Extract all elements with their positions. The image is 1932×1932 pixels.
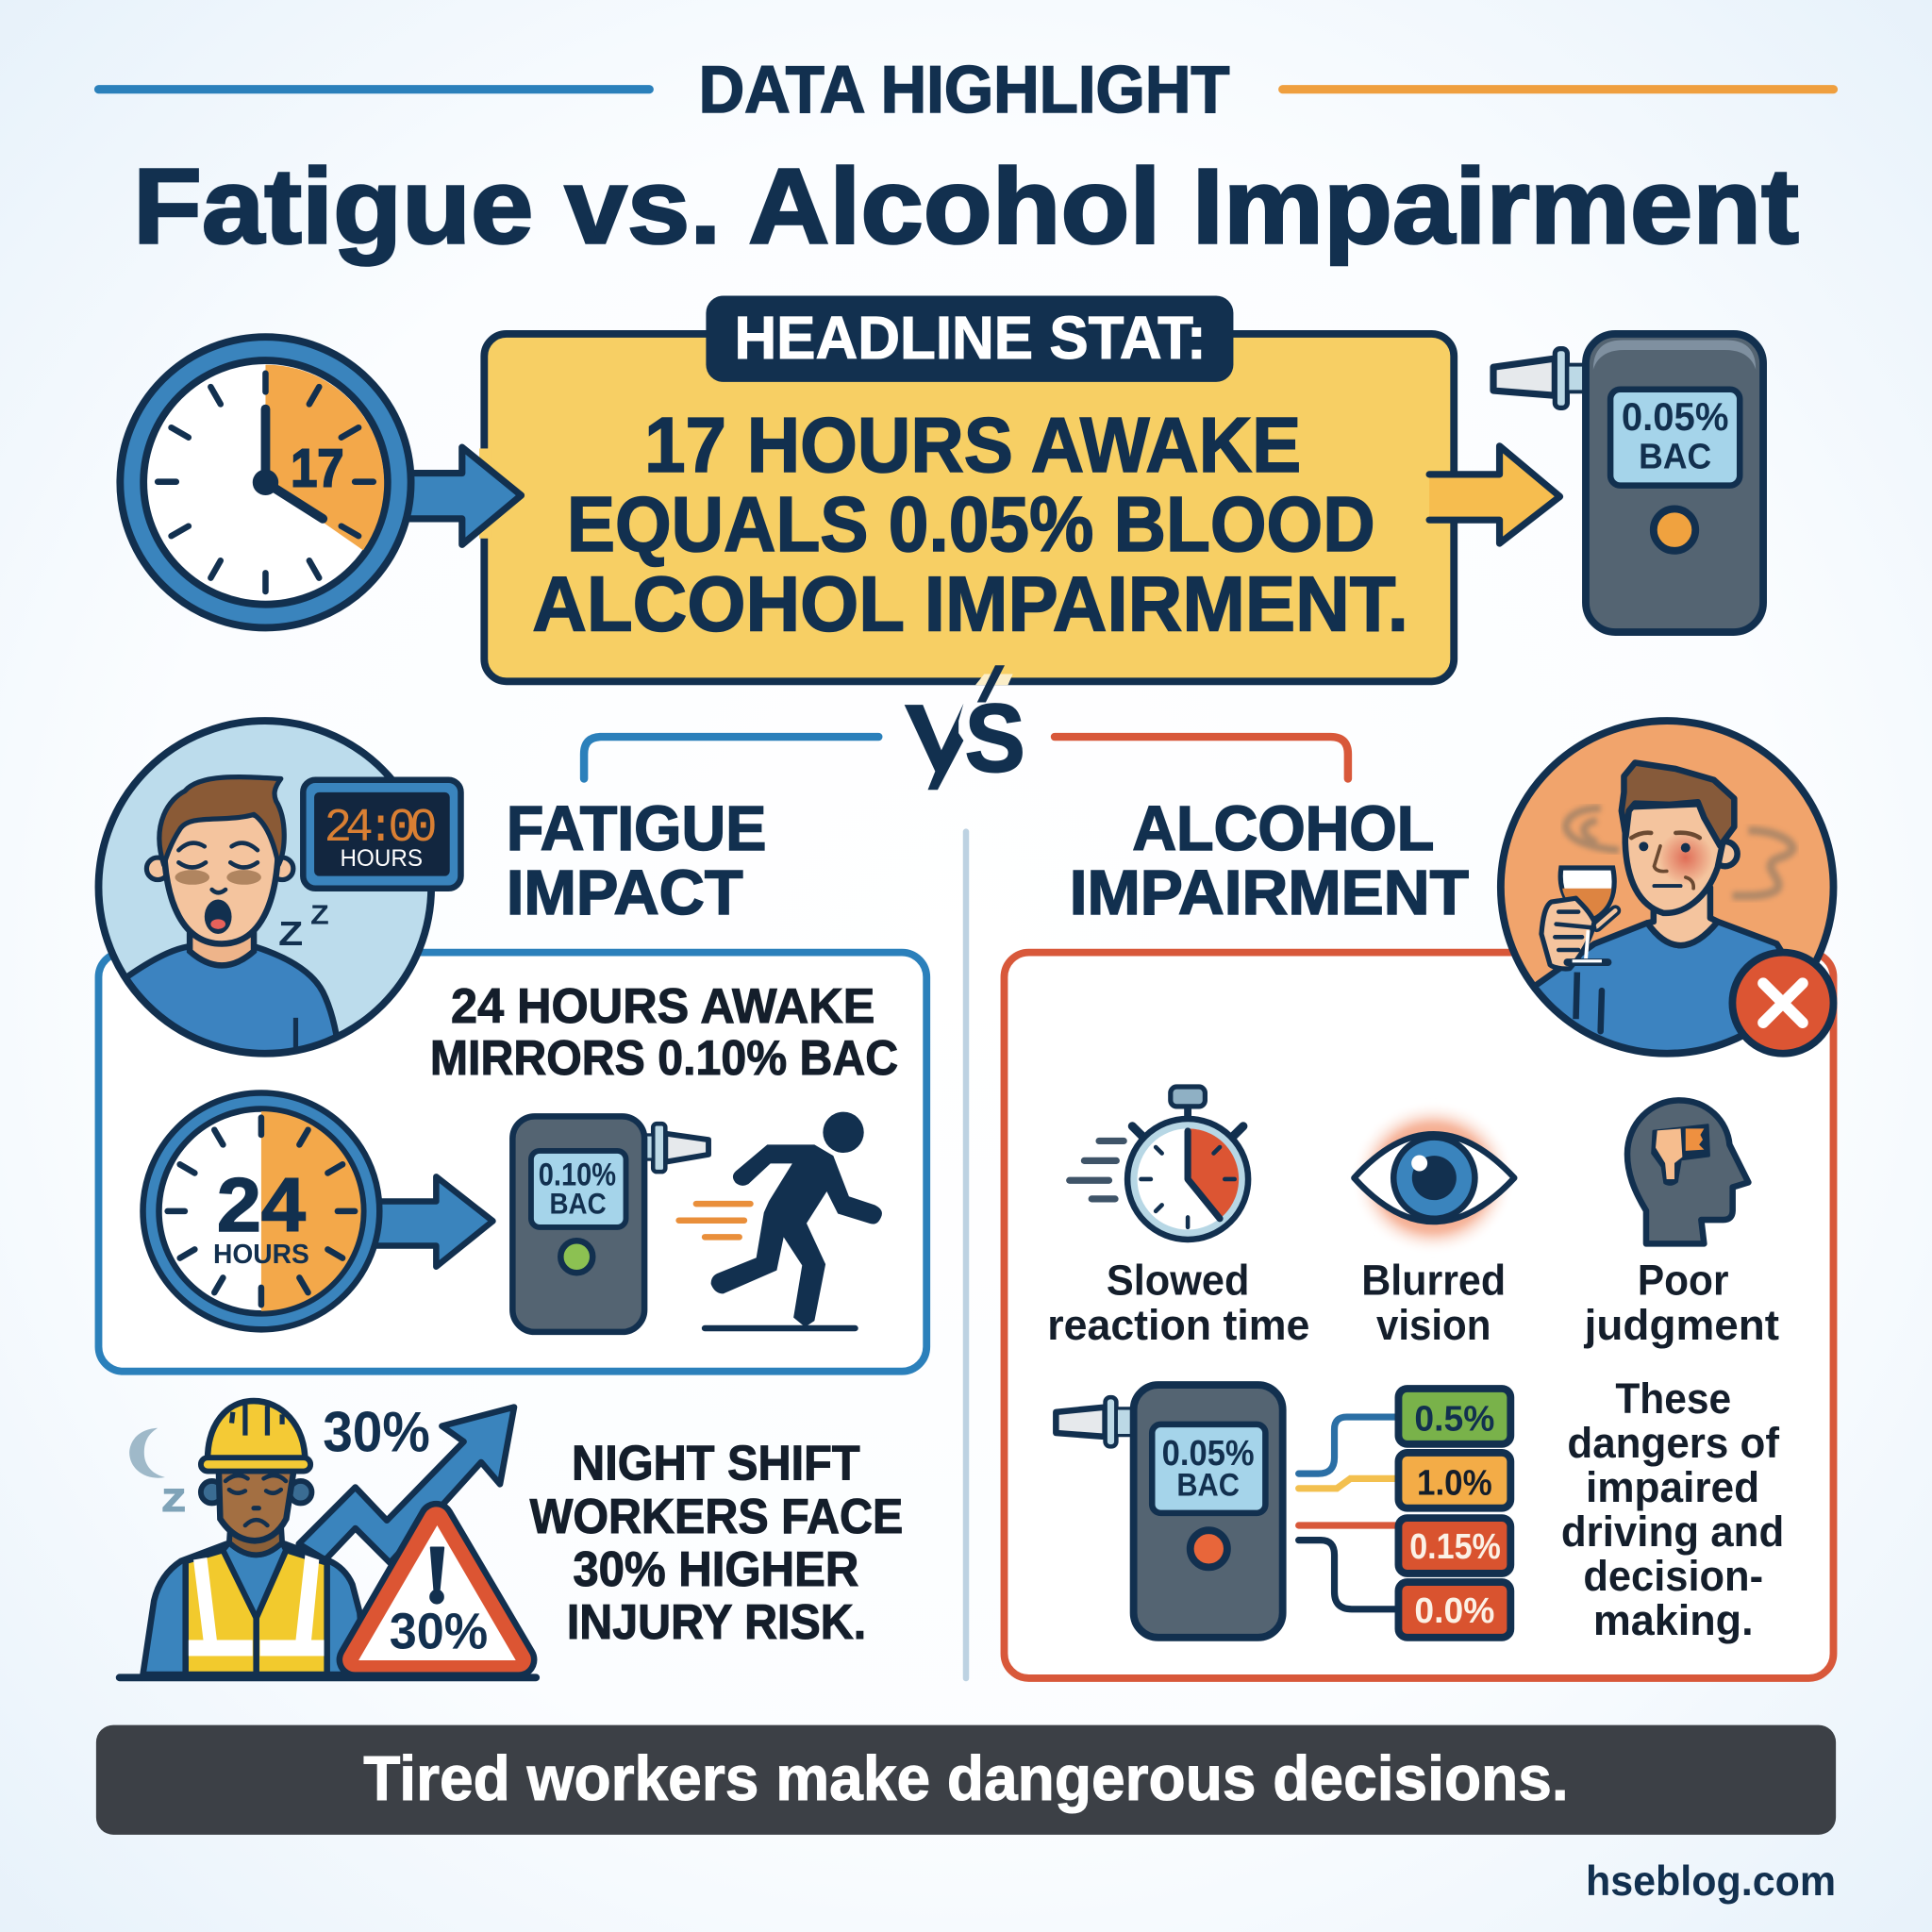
fatigue statement: 24 HOURS AWAKE <box>451 979 874 1034</box>
night shift statement: INJURY RISK. <box>567 1595 866 1650</box>
title: Fatigue vs. Alcohol Impairment <box>133 146 1799 266</box>
icon: stumbling figure <box>679 1112 882 1328</box>
icon: breathalyzer with levels: BAC <box>1176 1468 1240 1504</box>
icon: tired worker, rising arrow and warning: 30% <box>390 1605 488 1660</box>
dangers statement <box>1561 1374 1784 1644</box>
icon: breathalyzer with levels <box>1056 1385 1510 1638</box>
headline text: ALCOHOL IMPAIRMENT. <box>532 562 1408 648</box>
center divider <box>964 832 968 1678</box>
level 0.5% <box>1398 1389 1510 1444</box>
effect labels: Poor <box>1638 1257 1729 1305</box>
icon: 24 hour clock with arrow <box>143 1093 492 1329</box>
night shift statement <box>530 1437 903 1650</box>
icon: stopwatch <box>1070 1087 1248 1240</box>
effect labels: Slowed <box>1107 1257 1249 1305</box>
fatigue statement <box>430 979 898 1086</box>
wine glass in hand <box>1541 868 1615 969</box>
icon: breathalyzer 0.05% <box>1493 334 1763 632</box>
level 0.5%: 0.5% <box>1414 1399 1494 1439</box>
fatigue statement: MIRRORS 0.10% BAC <box>430 1031 898 1086</box>
headline text: 17 HOURS AWAKE <box>644 403 1301 489</box>
vs mark <box>905 665 1025 792</box>
headline text: EQUALS 0.05% BLOOD <box>567 482 1375 568</box>
effect labels: judgment <box>1584 1301 1779 1349</box>
icon: breathalyzer 0.10% <box>512 1116 708 1332</box>
dangers statement: impaired <box>1586 1463 1759 1511</box>
heading: fatigue impact: FATIGUE <box>507 794 766 864</box>
icon: breathalyzer 0.10%: 0.10% <box>539 1157 616 1192</box>
level 0.0%: 0.0% <box>1414 1591 1494 1631</box>
connector lines <box>1299 1417 1398 1609</box>
icon: 24 hour clock with arrow: HOURS <box>213 1240 309 1270</box>
dangers statement: making. <box>1593 1596 1754 1644</box>
icon: impaired person portrait <box>1501 721 1848 1059</box>
dangers statement: decision- <box>1583 1552 1763 1600</box>
digital clock 24:00 <box>303 780 460 889</box>
icon: 24 hour clock with arrow: 24 <box>217 1163 306 1248</box>
effect labels: vision <box>1376 1301 1491 1349</box>
icon: tired person portrait: Z <box>310 901 329 931</box>
dangers statement: driving and <box>1561 1507 1784 1556</box>
night shift statement: 30% HIGHER <box>573 1542 858 1597</box>
header: data highlight: DATA HIGHLIGHT <box>699 52 1230 126</box>
level 1.0%: 1.0% <box>1417 1463 1492 1503</box>
level 0.15%: 0.15% <box>1409 1527 1501 1567</box>
digital clock 24:00: 24:00 <box>325 802 438 855</box>
icon: tired worker, rising arrow and warning: Z <box>162 1482 185 1517</box>
vs brackets <box>584 737 1348 778</box>
effect labels <box>1047 1257 1779 1349</box>
effect labels: Blurred <box>1361 1257 1506 1305</box>
icon: 17 hour clock with arrow: 17 <box>291 438 343 497</box>
heading: alcohol impairment: ALCOHOL <box>1132 794 1434 864</box>
arrow to breathalyzer <box>1429 446 1560 543</box>
icon: head with thumbs down <box>1627 1100 1748 1243</box>
headline stat badge: HEADLINE STAT: <box>734 304 1207 372</box>
footer banner <box>96 1725 1836 1835</box>
icon: breathalyzer 0.10%: BAC <box>550 1188 607 1221</box>
icon: tired person portrait <box>98 721 460 1059</box>
heading: fatigue impact: IMPACT <box>507 858 743 928</box>
icon: breathalyzer with levels: 0.05% <box>1162 1434 1255 1474</box>
icon: tired person portrait: Z <box>278 914 303 953</box>
dangers statement: dangers of <box>1567 1419 1780 1467</box>
heading: fatigue impact <box>507 794 766 928</box>
level 1.0% <box>1398 1453 1510 1508</box>
digital clock 24:00: HOURS <box>340 846 423 872</box>
effect labels: reaction time <box>1047 1301 1309 1349</box>
night shift statement: NIGHT SHIFT <box>572 1437 860 1491</box>
icon: breathalyzer 0.05%: BAC <box>1639 437 1711 476</box>
source credit: hseblog.com <box>1586 1858 1836 1905</box>
icon: breathalyzer 0.05%: 0.05% <box>1622 394 1728 439</box>
level 0.15% <box>1398 1518 1510 1574</box>
footer banner: Tired workers make dangerous decisions. <box>363 1744 1569 1814</box>
panel: night shift risk <box>120 1401 903 1677</box>
panel: fatigue impact <box>98 953 926 1372</box>
night shift statement: WORKERS FACE <box>530 1490 903 1544</box>
vs mark: S <box>965 685 1025 792</box>
level 0.0% <box>1398 1582 1510 1638</box>
headline text <box>532 403 1408 648</box>
heading: alcohol impairment <box>1070 794 1469 928</box>
heading: alcohol impairment: IMPAIRMENT <box>1070 858 1469 928</box>
panel: alcohol impairment <box>1004 953 1834 1678</box>
icon: blurred eye <box>1352 1102 1514 1255</box>
icon: tired worker, rising arrow and warning <box>120 1401 536 1677</box>
dangers statement: These <box>1615 1374 1731 1423</box>
icon: red x badge <box>1732 953 1834 1054</box>
icon: tired worker, rising arrow and warning: 30% <box>323 1401 430 1464</box>
panel: headline stat <box>479 295 1454 681</box>
icon: 17 hour clock with arrow <box>120 337 521 627</box>
